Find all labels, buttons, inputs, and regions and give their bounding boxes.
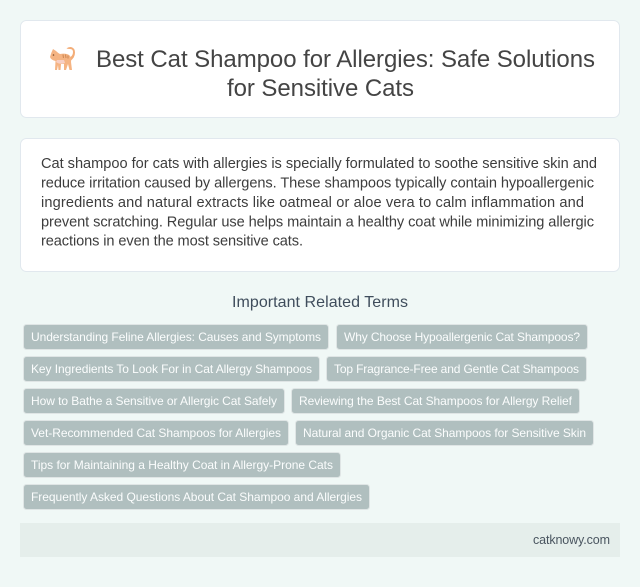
text block: intro paragraph: reactions in even the most sensitive cats. [41,234,303,250]
text block: intro paragraph: prevent scratching. Regular use helps maintain a healthy coat while minimizing allergic [41,214,594,230]
tag: Key Ingredients To Look For in Cat Allergy Shampoos [31,362,312,376]
tag: Natural and Organic Cat Shampoos for Sensitive Skin [303,426,586,440]
text block: intro paragraph [41,156,597,250]
text block: intro paragraph: Cat shampoo for cats with allergies is specially formulated to soothe sensitive skin and [41,156,597,172]
heading: related terms: Important Related Terms [232,294,408,311]
panel: title card [20,20,620,118]
tag [24,388,284,414]
footer: catknowy.com [533,533,610,547]
tag: Top Fragrance-Free and Gentle Cat Shampoos [334,362,579,376]
tag: Tips for Maintaining a Healthy Coat in Allergy-Prone Cats [31,458,333,472]
title: for Sensitive Cats [227,75,414,102]
tag: Reviewing the Best Cat Shampoos for Allergy Relief [299,394,573,408]
title [96,46,595,102]
panel: intro text card [20,138,620,272]
tag [292,388,580,414]
text block: intro paragraph: reduce irritation caused by allergens. These shampoos typically contain hypoallergenic [41,176,594,192]
icon: cat [50,47,75,70]
tag [326,356,586,382]
tag: Frequently Asked Questions About Cat Shampoo and Allergies [31,490,362,504]
title: Best Cat Shampoo for Allergies: Safe Solutions [96,46,595,73]
tag list [24,324,594,510]
tag [24,324,328,350]
tag [24,452,340,478]
footer [20,523,620,557]
tag [24,420,288,446]
tag: Vet-Recommended Cat Shampoos for Allergies [31,426,281,440]
tag: How to Bathe a Sensitive or Allergic Cat Safely [31,394,277,408]
text block: intro paragraph: ingredients and natural extracts like oatmeal or aloe vera to calm inflammation and [41,195,584,211]
tag [336,324,588,350]
tag: Why Choose Hypoallergenic Cat Shampoos? [344,330,580,344]
tag [24,356,320,382]
tag [24,484,370,510]
tag [296,420,594,446]
tag: Understanding Feline Allergies: Causes and Symptoms [31,330,321,344]
